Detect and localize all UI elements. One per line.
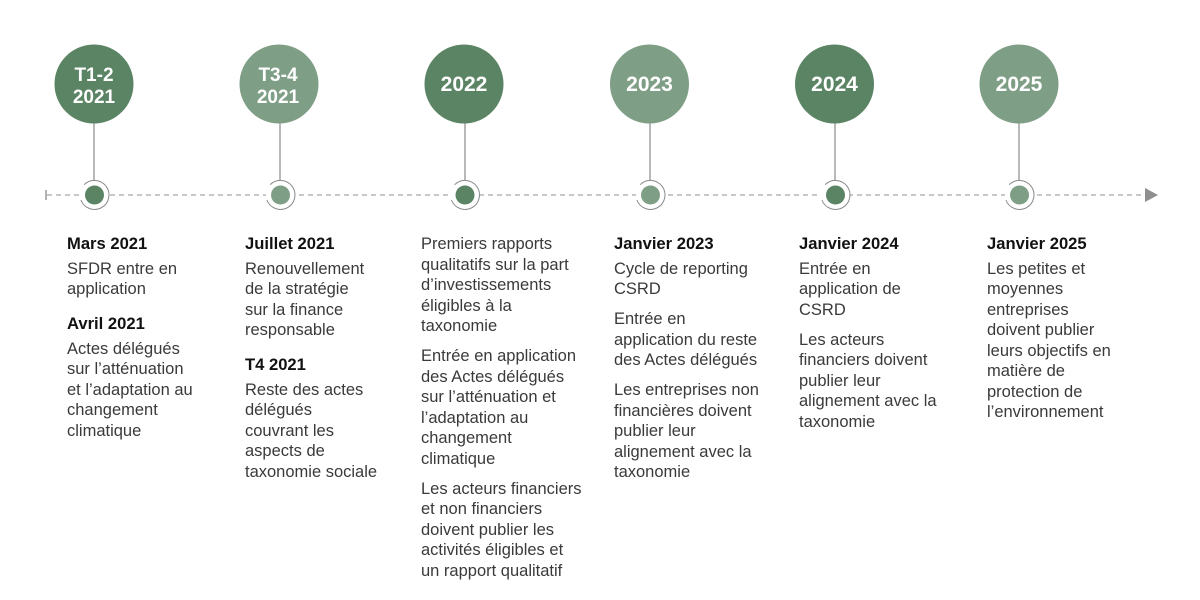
text block: 2024: financiers doivent xyxy=(799,351,927,369)
text block: T1-2 2021: sur l’atténuation xyxy=(67,360,184,378)
text block: 2023 xyxy=(614,234,759,481)
text block: 2022: climatique xyxy=(421,450,495,468)
text block: T3-4 2021: couvrant les xyxy=(245,422,334,440)
text block: T3-4 2021: Reste des actes xyxy=(245,381,363,399)
text block: 2025: doivent publier xyxy=(987,321,1094,339)
text block: 2023: des Actes délégués xyxy=(614,351,757,369)
text block: T3-4 2021: Juillet 2021 xyxy=(245,234,334,253)
text block: 2022: changement xyxy=(421,429,512,447)
marker: T3-4 2021: T3-4 xyxy=(258,65,298,86)
marker: 2024: 2024 xyxy=(811,73,858,96)
text block: T1-2 2021: Actes délégués xyxy=(67,340,180,358)
text block: 2024: publier leur xyxy=(799,372,881,390)
marker: T3-4 2021: 2021 xyxy=(257,87,300,108)
text block: 2022: sur l’atténuation et xyxy=(421,388,556,406)
text block: T1-2 2021: Mars 2021 xyxy=(67,234,147,253)
text block: T3-4 2021: délégués xyxy=(245,401,312,419)
text block: 2023: Janvier 2023 xyxy=(614,234,714,253)
marker: 2022 xyxy=(424,44,504,210)
text block: 2023: CSRD xyxy=(614,280,661,298)
text block: 2024: application de xyxy=(799,280,901,298)
text block: 2025 xyxy=(987,234,1111,421)
marker: T1-2 2021: T1-2 xyxy=(74,65,114,86)
text block: 2023: taxonomie xyxy=(614,463,690,481)
text block: 2023: Cycle de reporting xyxy=(614,260,748,278)
text block: T3-4 2021: responsable xyxy=(245,321,335,339)
text block: T3-4 2021: T4 2021 xyxy=(245,355,306,374)
text block: 2024: Les acteurs xyxy=(799,331,884,349)
text block: T3-4 2021 xyxy=(245,234,377,481)
text block: 2023: Entrée en xyxy=(614,310,686,328)
text block: T3-4 2021: taxonomie sociale xyxy=(245,463,377,481)
text block: T3-4 2021: Renouvellement xyxy=(245,260,364,278)
text block: 2022: des Actes délégués xyxy=(421,368,564,386)
text block: T1-2 2021: application xyxy=(67,280,146,298)
text block: 2024 xyxy=(799,234,937,431)
marker: 2024 xyxy=(795,44,874,210)
text block: 2024: Entrée en xyxy=(799,260,871,278)
text block: T3-4 2021: de la stratégie xyxy=(245,280,349,298)
text block: 2025: entreprises xyxy=(987,301,1069,319)
text block: 2022: un rapport qualitatif xyxy=(421,562,562,580)
text block: T1-2 2021 xyxy=(67,234,193,440)
text block: T1-2 2021: climatique xyxy=(67,422,141,440)
text block: 2022: l’adaptation au xyxy=(421,409,528,427)
text block: 2025: leurs objectifs en xyxy=(987,342,1111,360)
text block: T1-2 2021: SFDR entre en xyxy=(67,260,177,278)
marker: 2022: 2022 xyxy=(441,73,487,96)
text block: 2024: Janvier 2024 xyxy=(799,234,899,253)
marker: 2023: 2023 xyxy=(626,73,673,96)
text block: 2023: Les entreprises non xyxy=(614,381,759,399)
text block: 2025: protection de xyxy=(987,383,1082,401)
text block: 2022 xyxy=(421,235,582,580)
text block: 2025: matière de xyxy=(987,362,1065,380)
text block: 2023: alignement avec la xyxy=(614,443,752,461)
text block: 2022: éligibles à la xyxy=(421,296,512,314)
text block: 2022: Entrée en application xyxy=(421,347,576,365)
text block: 2022: taxonomie xyxy=(421,317,497,335)
text block: 2025: Les petites et xyxy=(987,260,1085,278)
text block: T1-2 2021: changement xyxy=(67,401,158,419)
text block: 2023: application du reste xyxy=(614,331,757,349)
text block: 2022: activités éligibles et xyxy=(421,541,563,559)
marker: T3-4 2021 xyxy=(240,44,318,210)
text block: 2022: et non financiers xyxy=(421,500,542,518)
text block: 2024: taxonomie xyxy=(799,413,875,431)
text block: 2022: doivent publier les xyxy=(421,521,554,539)
text block: 2023: publier leur xyxy=(614,422,696,440)
text block: T1-2 2021: et l’adaptation au xyxy=(67,381,193,399)
marker: T1-2 2021 xyxy=(54,44,134,210)
text block: 2025: moyennes xyxy=(987,280,1063,298)
text block: 2022: Les acteurs financiers xyxy=(421,480,582,498)
marker: T1-2 2021: 2021 xyxy=(73,87,116,108)
text block: 2025: Janvier 2025 xyxy=(987,234,1087,253)
text block: T1-2 2021: Avril 2021 xyxy=(67,314,145,333)
marker: 2023 xyxy=(610,44,689,210)
marker: 2025 xyxy=(980,44,1058,210)
text block: 2024: CSRD xyxy=(799,301,846,319)
text block: T3-4 2021: aspects de xyxy=(245,442,325,460)
text block: 2022: Premiers rapports xyxy=(421,235,552,253)
text block: 2022: qualitatifs sur la part xyxy=(421,256,569,274)
timeline axis with arrow xyxy=(46,188,1158,202)
marker: 2025: 2025 xyxy=(996,73,1043,96)
text block: 2024: alignement avec la xyxy=(799,392,937,410)
text block: 2023: financières doivent xyxy=(614,402,752,420)
text block: 2022: d’investissements xyxy=(421,276,551,294)
text block: 2025: l’environnement xyxy=(987,403,1103,421)
text block: T3-4 2021: sur la finance xyxy=(245,301,343,319)
